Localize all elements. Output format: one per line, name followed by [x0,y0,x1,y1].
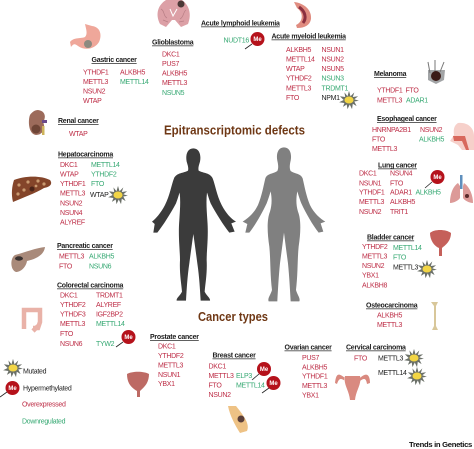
ovarian cancer: YBX1 [302,392,319,400]
glioblastoma: METTL3 [162,80,187,87]
title: epitranscriptomic defects: Epitranscriptomic defects [164,122,305,138]
colorectal carcinoma: YTHDF3 [60,312,86,318]
gastric cancer: WTAP [83,98,102,105]
acute myeloid leukemia: Acute myeloid leukemia [272,34,346,40]
esophageal cancer [372,116,444,153]
gastric cancer: NSUN2 [83,88,106,96]
melanoma: ADAR1 [406,98,428,104]
acute lymphoid leukemia: Acute lymphoid leukemia [201,20,280,28]
lung cancer: ALKBH5 [416,190,441,196]
osteocarcinoma [366,302,418,329]
icon: leukemia blood vessel [294,2,311,28]
gastric cancer: YTHDF1 [83,70,109,76]
legend: Downregulated [22,418,66,426]
breast cancer: NSUN2 [208,392,231,399]
hepatocarcinoma: METTL14 [91,162,120,169]
breast cancer: Me [260,367,269,373]
esophageal cancer: NSUN2 [420,127,443,134]
cervical carcinoma: METTL3 [378,356,403,362]
colorectal carcinoma: FTO [60,331,74,338]
renal cancer [58,118,99,138]
colorectal carcinoma: METTL3 [60,321,85,328]
cervical carcinoma: FTO [354,356,368,362]
colorectal carcinoma: NSUN6 [60,341,83,348]
ovarian cancer: YTHDF1 [302,374,328,380]
pancreatic cancer: NSUN6 [89,264,112,270]
icon: glioblastoma brain [158,0,190,27]
breast cancer: METTL3 [208,373,234,380]
bladder cancer: FTO [393,254,407,262]
colorectal carcinoma: METTL14 [96,321,125,328]
melanoma [374,71,428,104]
acute myeloid leukemia: ALKBH5 [286,47,311,54]
acute myeloid leukemia: WTAP [286,66,305,73]
colorectal carcinoma: Me [124,335,133,341]
acute myeloid leukemia: FTO [286,95,300,102]
breast cancer: Breast cancer [212,352,256,360]
acute myeloid leukemia: NSUN2 [322,56,344,64]
colorectal carcinoma [57,282,136,348]
lung cancer: ADAR1 [390,190,412,196]
lung cancer: ALKBH5 [390,199,415,206]
credit: trends in genetics: Trends in Genetics [409,440,472,449]
breast cancer [208,352,280,399]
hepatocarcinoma: NSUN2 [60,200,83,208]
esophageal cancer: FTO [372,136,386,144]
cervical carcinoma: Cervical carcinoma [346,344,406,352]
gastric cancer [83,57,149,105]
icon: breast [228,406,248,433]
hepatocarcinoma: DKC1 [60,162,78,169]
pancreatic cancer: FTO [59,264,73,270]
acute myeloid leukemia: METTL14 [286,56,315,64]
ovarian cancer [284,344,332,400]
acute lymphoid leukemia: Me [253,37,262,43]
prostate cancer [150,334,199,388]
icon: pancreas [11,247,45,272]
esophageal cancer: METTL3 [372,146,397,153]
bladder cancer: YTHDF2 [362,244,388,251]
esophageal cancer: ALKBH5 [419,136,444,144]
hepatocarcinoma: ALYREF [60,220,85,226]
prostate cancer: Prostate cancer [150,334,199,341]
prostate cancer: YTHDF2 [158,353,184,360]
legend: Overexpressed [22,402,66,408]
prostate cancer: DKC1 [158,344,176,350]
glioblastoma: PUS7 [162,61,179,68]
hepatocarcinoma [58,152,128,226]
hepatocarcinoma: Hepatocarcinoma [58,152,113,158]
colorectal carcinoma: TYW2 [96,341,115,348]
colorectal carcinoma: TRDMT1 [96,292,123,300]
bladder cancer: METTL14 [393,245,422,252]
acute myeloid leukemia: NSUN1 [322,47,344,54]
gastric cancer: ALKBH5 [120,70,145,76]
lung cancer [359,162,444,216]
lung cancer: FTO [390,180,404,188]
acute myeloid leukemia: NSUN5 [322,66,344,73]
lung cancer: NSUN2 [359,209,382,216]
prostate cancer: NSUN1 [158,372,181,379]
pancreatic cancer [57,243,114,270]
melanoma: YTHDF1 [377,88,403,94]
icon: stomach [70,24,101,49]
colorectal carcinoma: DKC1 [60,292,78,300]
bladder cancer: ALKBH8 [362,282,387,290]
hepatocarcinoma: NSUN4 [60,210,83,217]
breast cancer: FTO [208,382,222,390]
gastric cancer: Gastric cancer [92,57,137,64]
lung cancer: NSUN1 [359,180,382,188]
pancreatic cancer: Pancreatic cancer [57,243,113,250]
lung cancer: NSUN4 [390,170,413,178]
prostate cancer: METTL3 [158,362,183,370]
ovarian cancer: Ovarian cancer [284,344,332,352]
icon: liver [12,177,51,202]
osteocarcinoma: Osteocarcinoma [366,302,418,310]
breast cancer: METTL14 [236,382,265,390]
lung cancer: TRIT1 [390,209,408,216]
acute myeloid leukemia [272,34,359,109]
legend: Me [8,386,17,392]
acute lymphoid leukemia: NUDT16 [224,38,249,44]
icon: bone [431,302,438,330]
hepatocarcinoma: WTAP [90,192,109,199]
ovarian cancer: PUS7 [302,355,319,362]
cervical carcinoma [346,344,427,385]
icon: uterus [335,375,370,400]
ovarian cancer: ALKBH5 [302,364,327,372]
ovarian cancer: METTL3 [302,383,327,390]
gastric cancer: METTL3 [83,79,108,86]
acute myeloid leukemia: YTHDF2 [286,76,312,82]
lung cancer: DKC1 [359,170,377,178]
acute myeloid leukemia: METTL3 [286,86,311,92]
icon: bladder [430,230,451,256]
lung cancer: YTHDF1 [359,190,385,196]
colorectal carcinoma: Colorectal carcinoma [57,282,124,290]
pancreatic cancer: ALKBH5 [89,254,114,260]
glioblastoma: ALKBH5 [162,70,187,78]
hepatocarcinoma: FTO [91,181,105,188]
icon: lungs [450,175,473,203]
hepatocarcinoma: WTAP [60,172,79,178]
title: cancer types: Cancer types [198,309,268,324]
hepatocarcinoma: METTL3 [60,190,85,198]
icon: prostate bladder [127,372,149,397]
icon: esophagus head [450,123,474,150]
glioblastoma: DKC1 [162,52,180,58]
bladder cancer: METTL3 [362,254,387,260]
bladder cancer: NSUN2 [362,263,385,270]
acute myeloid leukemia: TRDMT1 [322,86,348,92]
breast cancer: Me [269,381,278,387]
breast cancer: ELP3 [236,373,252,380]
bladder cancer: YBX1 [362,272,379,280]
esophageal cancer: Esophageal cancer [377,116,437,123]
melanoma: Melanoma [374,71,407,78]
icon: colon [24,310,40,331]
lung cancer: METTL3 [359,199,384,206]
legend: Mutated [23,368,47,376]
melanoma: FTO [406,88,419,94]
gastric cancer: METTL14 [120,79,149,86]
acute myeloid leukemia: NPM1 [322,95,340,102]
colorectal carcinoma: IGF2BP2 [96,312,123,318]
osteocarcinoma: ALKBH5 [377,312,402,320]
colorectal carcinoma: YTHDF2 [60,302,86,309]
lung cancer: Lung cancer [378,162,417,170]
female body silhouette [243,147,325,301]
hepatocarcinoma: YTHDF2 [91,172,117,178]
glioblastoma: NSUN5 [162,90,185,97]
male body silhouette [152,148,236,301]
esophageal cancer: HNRNPA2B1 [372,127,411,134]
prostate cancer: YBX1 [158,381,175,388]
renal cancer: Renal cancer [58,118,99,125]
pancreatic cancer: METTL3 [59,254,84,260]
icon: kidney [29,110,47,135]
bladder cancer: Bladder cancer [367,234,415,242]
acute myeloid leukemia: NSUN3 [322,76,344,82]
bladder cancer [362,234,437,290]
breast cancer: DKC1 [208,364,226,370]
hepatocarcinoma: YTHDF1 [60,181,86,188]
melanoma: METTL3 [377,98,402,104]
cervical carcinoma: METTL14 [378,370,407,377]
legend [0,359,72,426]
osteocarcinoma: METTL3 [377,322,402,329]
bladder cancer: METTL3 [393,264,418,272]
lung cancer: Me [433,175,442,181]
colorectal carcinoma: ALYREF [96,302,121,309]
glioblastoma [152,40,194,97]
legend: Hypermethylated [23,386,72,392]
icon: melanoma skin [428,60,445,84]
acute lymphoid leukemia [201,20,280,49]
renal cancer: WTAP [69,131,88,138]
glioblastoma: Glioblastoma [152,40,194,46]
